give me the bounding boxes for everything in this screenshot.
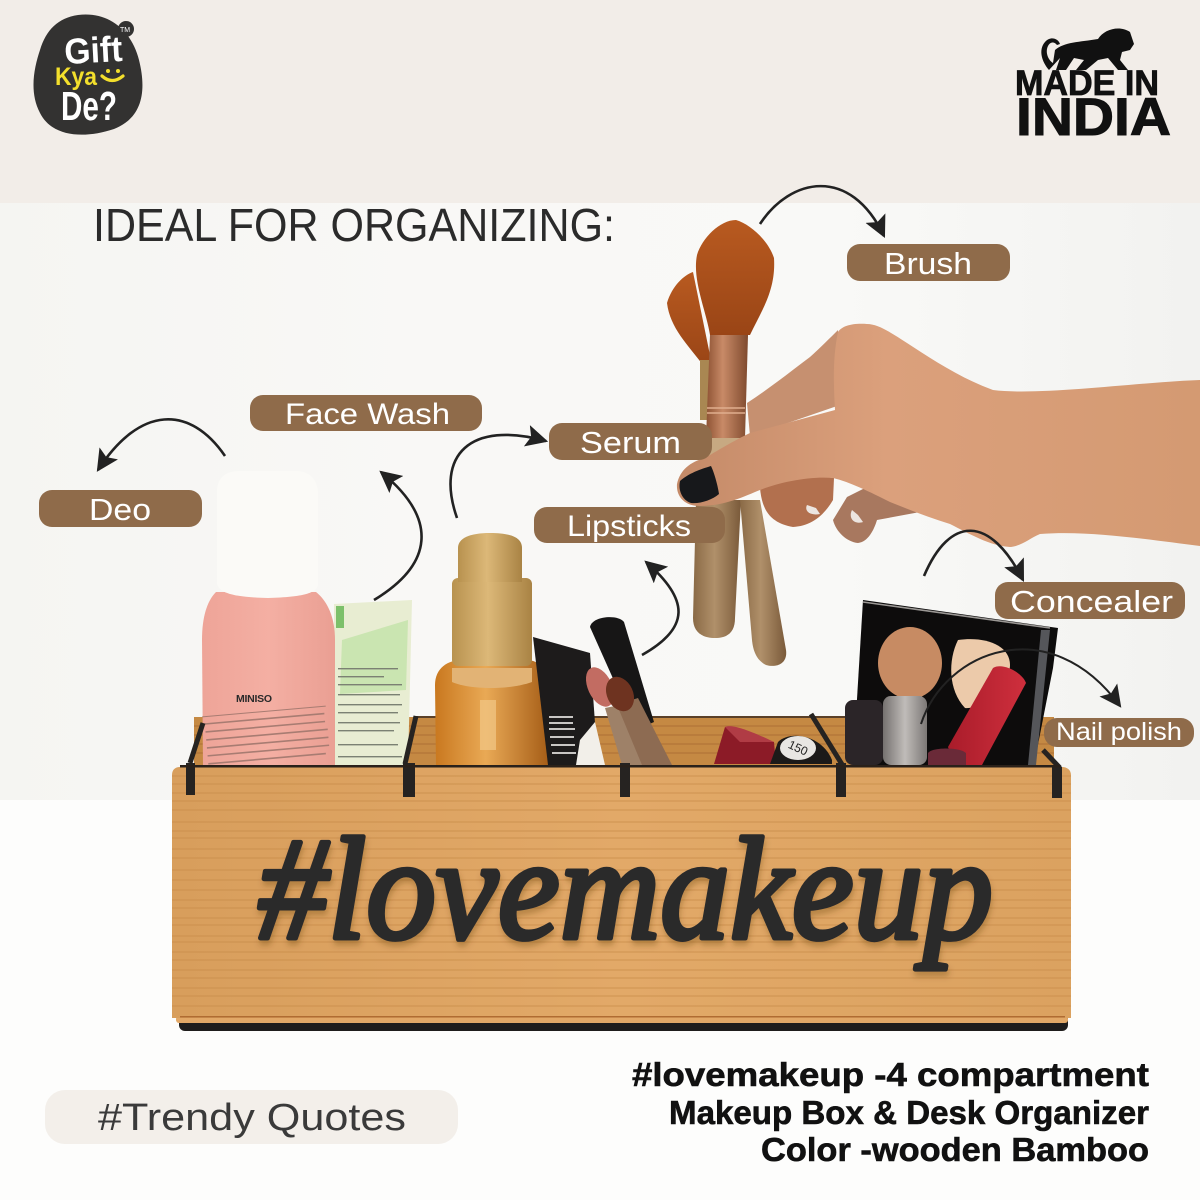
callout: Concealer (924, 531, 1185, 619)
callout: Deo (39, 419, 225, 527)
product title: Makeup Box & Desk Organizer (669, 1094, 1149, 1131)
callout: Brush (760, 186, 1010, 281)
callout: Concealer: Concealer (1010, 584, 1173, 619)
logo: Made in India: MADE IN (1015, 64, 1159, 103)
product: serum bottle (435, 533, 548, 765)
callout: Nail polish: Nail polish (1056, 718, 1182, 746)
product title (632, 1056, 1149, 1168)
callout: Brush: Brush (884, 246, 972, 281)
tag: Trendy Quotes: #Trendy Quotes (98, 1097, 406, 1139)
logo: Gift Kya De: TM (120, 27, 130, 34)
icon: lion (1041, 28, 1134, 70)
callout: Lipsticks: Lipsticks (567, 510, 691, 543)
thumb nail (679, 466, 719, 503)
back of hand and thumb (677, 324, 1200, 547)
product: hand (677, 324, 1200, 547)
product: lipsticks and small brushes (580, 617, 832, 765)
#lovemakeup raised lettering: #lovemakeup (258, 808, 993, 970)
heading: IDEAL FOR ORGANIZING: (93, 199, 615, 251)
logo: Gift Kya De: Gift (63, 28, 123, 72)
product: face wash tube (334, 600, 412, 766)
callout: Serum: Serum (580, 425, 681, 460)
box slots and dividers (186, 714, 1062, 798)
product: concealer palette (845, 600, 1058, 765)
box top edge (180, 765, 1060, 768)
product: deo bottle: MINISO (236, 693, 272, 705)
logo: Made in India: INDIA (1016, 88, 1171, 147)
callout: Face Wash (250, 395, 482, 600)
product title: Color -wooden Bamboo (761, 1131, 1149, 1168)
box: front panel (172, 714, 1071, 1031)
product: deo bottle (202, 471, 335, 766)
product title: #lovemakeup -4 compartment (632, 1056, 1149, 1093)
callout: Serum (451, 423, 712, 518)
callout: Deo: Deo (89, 492, 151, 527)
curled fingers (760, 474, 834, 527)
tag: Trendy Quotes (45, 1090, 458, 1144)
logo: Gift Kya De: Kya (55, 63, 98, 91)
logo: Gift Kya De: De? (61, 83, 117, 129)
logo: Made in India (1015, 28, 1171, 147)
callout: Lipsticks (534, 507, 725, 655)
index finger (747, 330, 840, 436)
product: lipsticks and small brushes: 150 (786, 737, 810, 759)
callout: Nail polish (921, 649, 1194, 747)
logo: Gift Kya De (33, 15, 142, 135)
product: black sachet (533, 637, 605, 765)
box interior back wall (194, 716, 1054, 767)
callout: Face Wash: Face Wash (285, 398, 450, 431)
product: brushes (667, 220, 786, 666)
